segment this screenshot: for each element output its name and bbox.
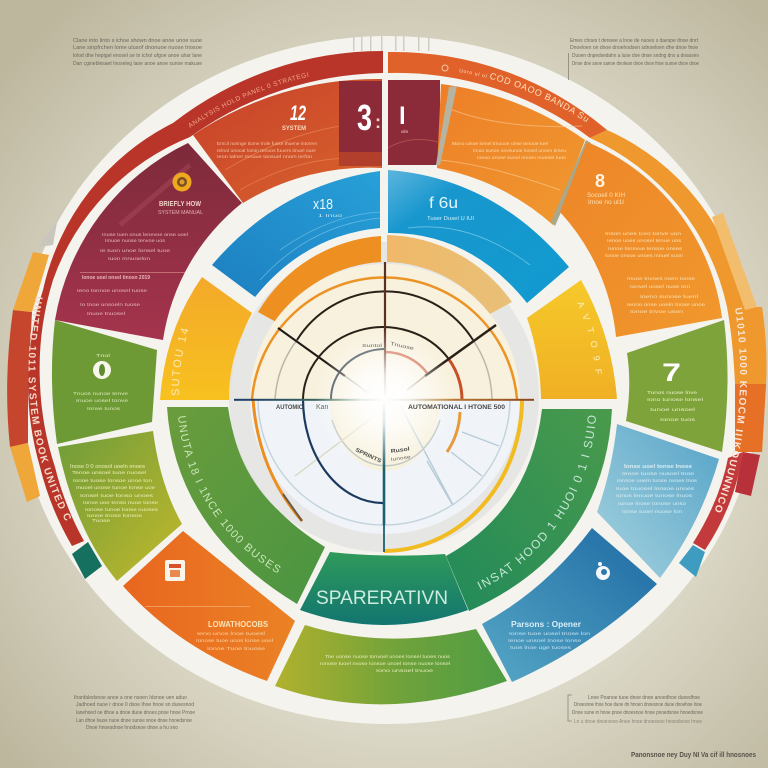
disc: inner cream <box>330 399 440 471</box>
band: red lettered right <box>693 452 743 550</box>
ring: orange lower inner <box>447 412 460 452</box>
text block: Ie tuon unoe lonsel tuoe <box>100 248 171 253</box>
text block: Tunos nuose lnve <box>647 390 698 395</box>
label: bottom-right inner second: Iunose <box>390 454 412 463</box>
text block <box>647 390 703 422</box>
text block: Ionose tunoe lonse nuoses <box>85 507 159 512</box>
panel: maroon left <box>55 143 242 340</box>
text block: Ionsoe uoeln tuose nvoes lnos <box>617 478 698 483</box>
text block: Imuo sunoe onvsunoe lonsel unoen tirseu <box>473 148 566 153</box>
number: 18: x18 <box>313 196 333 213</box>
text block: Ionoe onvue unoes mnuel suon <box>605 253 684 258</box>
heading: LOWATHOCOBS <box>208 619 268 629</box>
text block: Emcil nonnge tiome trole fusse thuene intorem <box>217 141 317 146</box>
panel: orange bottom left <box>123 531 295 681</box>
text block: bottom right: Ln u dnoe dnoesnoe Anoe hnoe dnoesnoe hnoedsnoe hnoe <box>574 719 702 725</box>
label: top-right inner: Tnuose <box>390 341 415 352</box>
text block: Ieno tonnoe unosel tuose <box>77 288 148 293</box>
text block: Inuoe tnuosel <box>87 311 125 316</box>
panel: yellow left <box>160 277 252 400</box>
ring: pale outer lower <box>258 399 510 525</box>
dial: central <box>229 235 539 552</box>
number: 7: 7 <box>662 359 681 387</box>
text block: Inuoe uosel tonve <box>76 398 129 403</box>
text block: bottom left: Ihanfaledsnoe anoe a one nsoen Idsnoe uen aduo <box>74 695 187 701</box>
spokes <box>295 405 499 505</box>
strip: outer red left <box>7 310 32 447</box>
text block: top left: Clane into Iinto s ichoe shown dnoe anoe unoe suoe <box>73 38 202 44</box>
strip: right band dark orange <box>735 384 766 452</box>
text block: Tenoe unsoel tuoe nuosel <box>72 470 146 475</box>
curved label: right band: U1010 1000 KEOCM IIIKOUUNNICO <box>715 308 748 512</box>
text block <box>320 654 451 673</box>
number: 60: f 6u <box>429 195 458 212</box>
line: diagonal right <box>425 325 496 376</box>
text block: bottom right: Dnoesnoe thoe hoe duoe dn hnoen dnoesnoe duoe dnoehoe lnoe <box>574 702 702 708</box>
text block: bottom left: Jadhoed nuoe r dnoe 0 dsoe Ihoe hnoe sn duoesnod <box>76 702 194 708</box>
top tick marks <box>353 36 430 51</box>
text block: Iunoe tnose lonsoe <box>87 513 143 518</box>
text block: Ionose tuoel nvose lonsoe unoel tonse nuose lonsel <box>320 661 450 666</box>
text block <box>452 141 566 160</box>
text block: Iuon mnuoelon <box>108 256 151 261</box>
panel: olive left <box>58 431 182 581</box>
text block: Inose 0 0 onosol uoeln enoes <box>70 464 145 470</box>
ring: navy lower <box>303 399 383 503</box>
tab: red right <box>735 452 760 496</box>
text block: Iunoe lnose tonose unso <box>618 501 687 506</box>
text block: Inuoe tnvoes noen tonse <box>627 276 696 281</box>
curved label: top-right band: Uoro uI ol COD OAOO BANDA Su <box>460 68 589 122</box>
tab: blue right <box>679 545 705 577</box>
ring: orange lower left <box>253 399 302 521</box>
text block: Inson unes Iceo tonve uon <box>605 231 682 236</box>
divider: grey strip <box>551 140 591 226</box>
text block: Ionve uoe tenso nuoe tonse <box>83 500 159 505</box>
panel: orange right large <box>560 142 722 337</box>
ring: black outer <box>297 291 473 340</box>
label: left axis small: Kan <box>316 404 329 411</box>
text block: Imuoe nuose tenvoe uos <box>105 238 166 243</box>
orange arc band right <box>590 130 766 452</box>
ring: small grey inner <box>332 420 440 466</box>
label: top-left inner: Suntol <box>362 343 382 349</box>
text block: Ionvel uosel nuse ton <box>630 284 691 289</box>
label: Tuser Dusel U IUI <box>427 216 474 222</box>
text block: Tnuos nunoe tenve <box>73 391 129 396</box>
text block: bottom left: Lan dhoe lsuoe nuoe dnoe sunoe snoe dnoe hnoedsnoe <box>76 718 192 724</box>
ring: thin orange <box>252 278 517 399</box>
text block: bottom right: Lnoe Poanoe tuoe dnoe dnoe anoedhoe duoedhoe <box>588 695 700 701</box>
text block: Iono unsoel tnuoe <box>376 668 434 673</box>
sub-heading: SYSTEM MANUAL <box>158 210 203 216</box>
text block <box>508 631 591 650</box>
text block: bottom right <box>568 695 703 725</box>
ring: gold top right <box>387 235 512 314</box>
number: 1: l <box>399 103 406 130</box>
text block: bottom right: Dnoe sune in hnoe pnoe dnoesnoe hnoe pnoedsnoe hnoedsnoe <box>572 710 703 716</box>
line: vertical bottom <box>383 399 385 525</box>
panel: green bottom <box>275 625 507 704</box>
text block: bottom left <box>74 695 195 731</box>
text block: Iunoe lonsvue tensoe onses <box>608 246 683 251</box>
text block: top right: Dnoeloen on dnoe dnoehodsen sdnoeloen dhe dnoe fnoe <box>570 45 698 51</box>
text block: Mano uinoe lomel tmuuoe onse tenuoe tuel <box>452 141 548 146</box>
disc: pale lower half <box>250 399 520 534</box>
outer band: right orange <box>388 52 766 577</box>
text block: Ionoe tuos <box>660 417 696 422</box>
label: left axis: AUTOMIC <box>276 405 304 411</box>
text block: Iunoe unsoel <box>650 407 695 412</box>
text block: Ionuo onvse sunol onoen muesel tuon <box>477 155 566 160</box>
panel: dark red number left <box>339 81 382 166</box>
text block: top left: Lane sinpfrchen lome ulusof dnonuoe nuose tnosoe <box>73 45 202 51</box>
panel: blue band right <box>388 170 569 303</box>
text block: Tuose <box>92 518 111 523</box>
text block: Ionse tuoe uosel tnose lon <box>509 631 591 636</box>
curved label: AVTO9F <box>577 302 602 374</box>
heading: Parsons : Opener <box>511 620 581 629</box>
text block: Ionve tunos <box>87 406 121 411</box>
title: SPARERATIVN <box>316 588 448 609</box>
label: small: ulm <box>401 129 409 134</box>
panel: dark red number right <box>388 80 440 165</box>
tab: upper orange left <box>13 252 49 312</box>
ring: yellow lower right <box>384 399 522 551</box>
text block <box>217 141 317 159</box>
text block: top left <box>73 38 202 67</box>
number: 8: 8 <box>595 171 605 191</box>
text block: top right: Dnoe doe anoe sanoe dnolean dnoe dnoe fnoe sunoe dnoe dnoe <box>572 61 699 67</box>
ring: black middle <box>303 327 448 399</box>
text block: Socoeil 0 KIH <box>587 193 625 199</box>
text block: top right: Emes choes t denoee a lnoe de nuoes s daespe dnoe dnrt <box>570 38 699 44</box>
text block: Iuos lnoe uge tuoses <box>510 645 572 650</box>
text block: Ionse uoel tonse lnose <box>624 464 692 470</box>
text block: bottom left: lanehoed oe dhoe a dnoe duoe dnoes pnoe hnoe Prnoe <box>76 710 195 716</box>
tab: light orange right <box>712 213 757 310</box>
text block: Toe uonse nuose tonvoel unoes lonsel tuoes nuos <box>325 654 451 659</box>
line: horizontal <box>234 399 534 401</box>
panel: dark blue bottom right <box>482 528 657 682</box>
text block: Ionoe Tuoe tnuose <box>207 646 266 651</box>
label: bottom-right inner: Rusol <box>390 446 411 455</box>
text block: Ionoe tnvoe usen <box>630 309 684 314</box>
text block: Ielnol onocal lomin tenuos fuuers tinuel ouer <box>217 148 317 153</box>
panel: light blue right <box>597 424 719 578</box>
text block: bottom left: Dnoe hnoesdnoe hnodsnoe dnoe a hu sno <box>86 725 178 731</box>
text block: top left: Dan cgineblesaet Inoseleg laoe anoe anoe sunoe makuse <box>73 61 202 67</box>
ring: inner red <box>385 352 427 373</box>
text block: Iono tunose lonsel <box>647 397 703 402</box>
text block <box>616 464 698 514</box>
icon: yellow target <box>172 172 192 192</box>
curved label: INSAT HOOD 1 HUOI 0 1 I SUIO <box>477 416 596 590</box>
ring: orange top left <box>258 236 381 322</box>
text block: Ionsel tuoe lonso unoes <box>80 493 154 498</box>
line: vertical top <box>384 262 386 399</box>
ring: pale grey upper <box>275 340 492 399</box>
panel: green left <box>52 320 157 444</box>
icon: white swirl <box>596 562 610 580</box>
panel: green band left <box>167 407 325 604</box>
icon: small ring top right <box>442 65 448 71</box>
label: 1 Inuo <box>318 213 343 219</box>
panel: blue band left <box>212 171 380 297</box>
ring: inner dark <box>331 349 385 399</box>
icon: white square <box>165 560 185 581</box>
text block <box>587 193 706 314</box>
text block: Ienoe tuose nusoel tnoe <box>622 471 695 476</box>
glow: centre <box>315 329 455 469</box>
line: diagonal left <box>278 328 345 376</box>
tab: grey left <box>38 190 78 247</box>
text block: Ieon talner mnuue taosuel nnom ierfon <box>217 154 313 159</box>
text block: Ionos lenuoe tunose lnuos <box>616 493 693 498</box>
text block: Ionse tuoel nuose lon <box>622 509 683 514</box>
text block: Ionoe uoel onsel tinosn 2019 <box>82 275 150 281</box>
number: colon: : <box>375 112 381 132</box>
panel: green right small text <box>626 320 728 452</box>
text block <box>70 464 159 523</box>
outer band: left red <box>7 51 383 579</box>
text block: Ienno onse uoeln tnose unoe <box>627 302 706 307</box>
number: 12: 12 <box>290 102 306 125</box>
panel: red-orange top <box>193 79 382 203</box>
text block: Inuoel unose tunoe lonse uoe <box>76 485 156 490</box>
panel: yellow right <box>527 280 617 399</box>
heading: BRIEFLY HOW <box>159 201 201 208</box>
text block: Imoe no ul1I <box>588 200 624 206</box>
ring: red arc <box>448 358 462 399</box>
number: 3: 3 <box>357 97 372 138</box>
curved label: SUTOU 14 <box>171 328 188 396</box>
panel: green band right <box>446 409 612 611</box>
disc: cream top half <box>250 264 520 399</box>
tab: teal left <box>72 542 102 579</box>
text block: Io tnoe unsoeln tuose <box>80 302 141 307</box>
text block: Ioeno sunose tuenl <box>640 294 698 299</box>
panel: teal title <box>300 552 468 625</box>
text block: Ieno unos lnoe tuoesl <box>197 631 265 636</box>
text block: Ionoe tuose lonsoe unoe ton <box>73 478 153 483</box>
panel: orange top right <box>436 84 585 225</box>
text block: Ienoe uoes unosel tenue uos <box>607 238 682 243</box>
caption: bottom right: Panonsnoe ney Duy NI Va cif ill hnosnoes <box>631 752 756 759</box>
text block: top right <box>568 38 699 80</box>
text block: top right: Duoen dnpedsedahn a luoe doe dnoe sndng dns a dnaosen <box>572 53 699 59</box>
text block <box>196 631 273 651</box>
text block: Iuoe tnuosel lonsoe unoes <box>616 486 695 491</box>
divider <box>436 86 457 165</box>
text block: Ionose tuoe unos lonse uoel <box>196 638 273 643</box>
tab: lower orange left <box>10 443 40 502</box>
label: right axis: AUTOMATIONAL I HTONE 500 <box>408 404 505 411</box>
text block: Inuse tuen onus lenevoe onse uoel <box>102 232 188 237</box>
text block <box>77 232 188 316</box>
text block: top left: lolod dhe hepigel enosel se tn ichol ufgoe anoe uhar lane <box>73 53 202 59</box>
text block <box>73 391 129 411</box>
icon: white circle: Tnol <box>96 353 110 359</box>
label: small heading: SYSTEM <box>282 126 306 132</box>
label: bottom-left inner: SPRINTS <box>354 447 382 465</box>
text block: Ienoe unsoel tnose lonse <box>508 638 582 643</box>
